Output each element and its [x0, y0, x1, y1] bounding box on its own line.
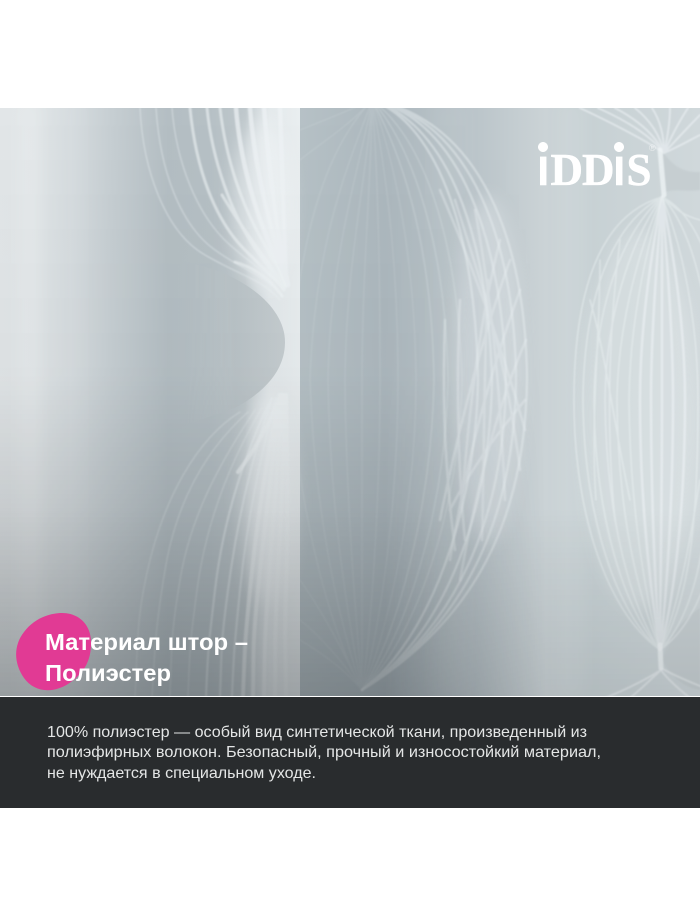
heading: Полиэстер — [45, 660, 171, 686]
description text: полиэфирных волокон. Безопасный, прочный и износостойкий материал, — [47, 744, 601, 761]
IDDIS logo: ® — [649, 143, 656, 153]
dark description panel — [0, 697, 700, 808]
curtain photo panel — [0, 100, 700, 700]
heading: Материал штор – — [45, 629, 248, 655]
IDDIS logo: I — [614, 148, 625, 194]
IDDIS logo: D — [550, 145, 583, 195]
IDDIS logo — [538, 142, 656, 195]
description text: не нуждается в специальном уходе. — [47, 765, 316, 782]
IDDIS logo: D — [582, 145, 614, 195]
pink blob behind heading — [16, 613, 91, 690]
infographic canvas — [0, 108, 700, 808]
IDDIS logo: S — [626, 145, 652, 195]
description text: 100% полиэстер — особый вид синтетической ткани, произведенный из — [47, 724, 587, 741]
IDDIS logo: I — [538, 148, 549, 194]
